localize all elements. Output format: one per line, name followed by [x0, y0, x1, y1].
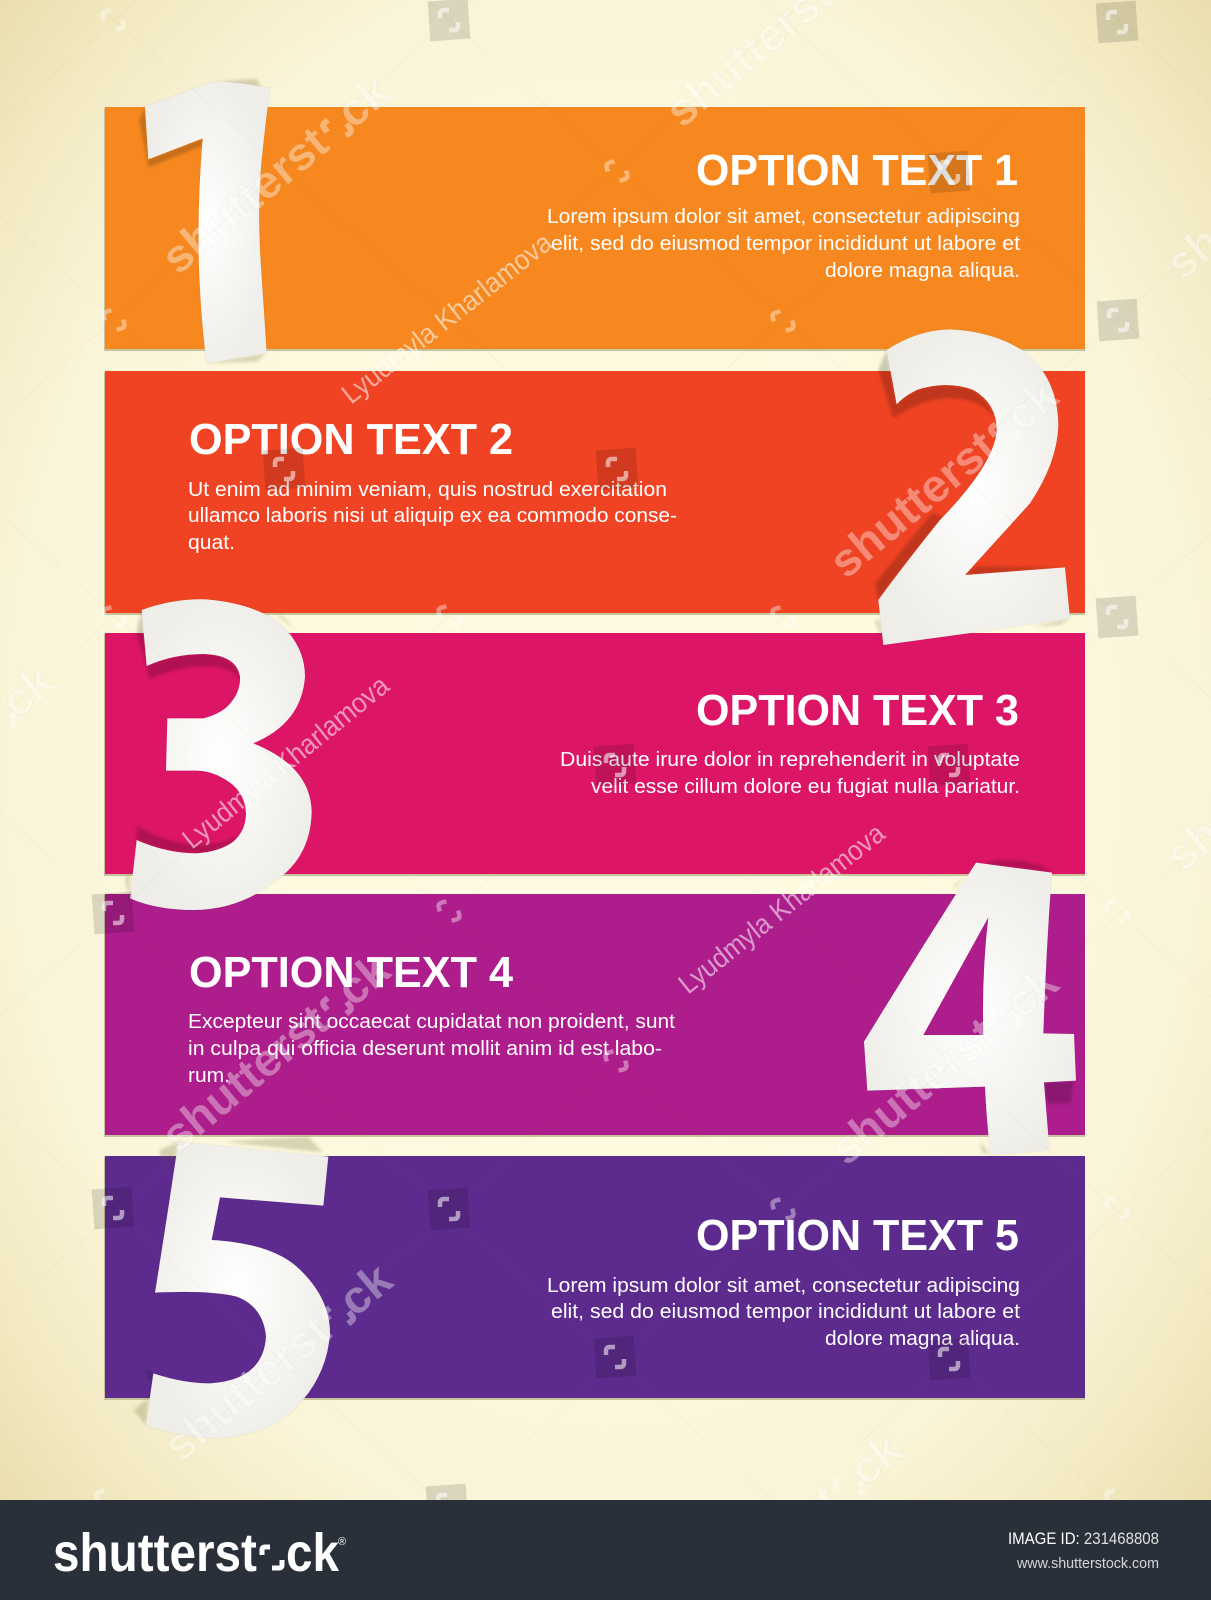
text block: option 1 body: elit, sed do eiusmod tempor incididunt ut labore et — [551, 232, 1020, 255]
text block: option 4 body: rum. — [188, 1064, 230, 1087]
panel: option 1 orange band — [104, 107, 1085, 351]
text block: option 2 body: Ut enim ad minim veniam, quis nostrud exercitation — [188, 478, 667, 501]
text block: option 4 body — [188, 1010, 675, 1087]
panel: option 4 purple band — [104, 894, 1085, 1137]
icon: paper numeral 2 — [875, 329, 1070, 645]
text block: option 1 body: dolore magna aliqua. — [825, 259, 1020, 282]
watermark: stock photo overlay: Lyudmyla Kharlamova — [672, 817, 891, 1000]
watermark: stock photo overlay: shutterstock — [151, 942, 400, 1162]
watermark: stock photo overlay: shutterstock — [151, 64, 400, 284]
text block: option 3 body — [560, 748, 1020, 798]
text block: option 5 body: elit, sed do eiusmod tempor incididunt ut labore et — [551, 1300, 1020, 1323]
text block: option 1 body — [547, 205, 1020, 282]
heading: option text 3: OPTION TEXT 3 — [696, 686, 1019, 735]
text block: option 2 body — [188, 478, 677, 554]
icon: paper numeral 4 — [864, 860, 1076, 1155]
text block: option 5 body — [547, 1274, 1020, 1350]
text block: option 2 body: quat. — [188, 531, 235, 554]
text block: option 3 body: Duis aute irure dolor in reprehenderit in voluptate — [560, 748, 1020, 771]
footer bar — [0, 1500, 1211, 1600]
text block: option 5 body: Lorem ipsum dolor sit amet, consectetur adipiscing — [547, 1274, 1020, 1297]
watermark: stock photo overlay: shutterstock — [819, 955, 1068, 1175]
text block: option 4 body: in culpa qui officia deserunt mollit anim id est labo- — [188, 1037, 662, 1060]
watermark: stock photo overlay: Lyudmyla Kharlamova — [176, 669, 395, 855]
footer logo: ® — [338, 1536, 346, 1548]
footer logo: shutterstock — [53, 1523, 340, 1583]
watermark: stock photo overlay: shutterstock — [153, 1252, 402, 1472]
text block: option 4 body: Excepteur sint occaecat cupidatat non proident, sunt — [188, 1010, 675, 1033]
icon: paper numeral 1 — [139, 79, 270, 363]
panel: option 3 magenta band — [104, 633, 1085, 876]
text block: option 5 body: dolore magna aliqua. — [825, 1327, 1020, 1350]
heading: option text 2: OPTION TEXT 2 — [189, 415, 513, 464]
panel: option 2 red band — [104, 371, 1085, 615]
text block: option 1 body: Lorem ipsum dolor sit amet, consectetur adipiscing — [547, 205, 1020, 228]
text block: option 3 body: velit esse cillum dolore eu fugiat nulla pariatur. — [591, 775, 1020, 798]
website url: www.shutterstock.com — [1016, 1555, 1159, 1572]
icon: paper numeral 3 — [125, 599, 312, 910]
watermark: stock photo overlay: Lyudmyla Kharlamova — [336, 226, 558, 410]
heading: option text 4: OPTION TEXT 4 — [189, 948, 514, 997]
panel: option 5 violet band — [104, 1156, 1085, 1400]
heading: option text 1: OPTION TEXT 1 — [696, 146, 1018, 195]
image id: IMAGE ID: 231468808 — [1008, 1530, 1159, 1548]
text block: option 2 body: ullamco laboris nisi ut aliquip ex ea commodo conse- — [188, 504, 677, 527]
watermark: stock photo overlay: shutterstock — [819, 368, 1068, 588]
heading: option text 5: OPTION TEXT 5 — [696, 1211, 1019, 1260]
icon: paper numeral 5 — [133, 1137, 330, 1438]
